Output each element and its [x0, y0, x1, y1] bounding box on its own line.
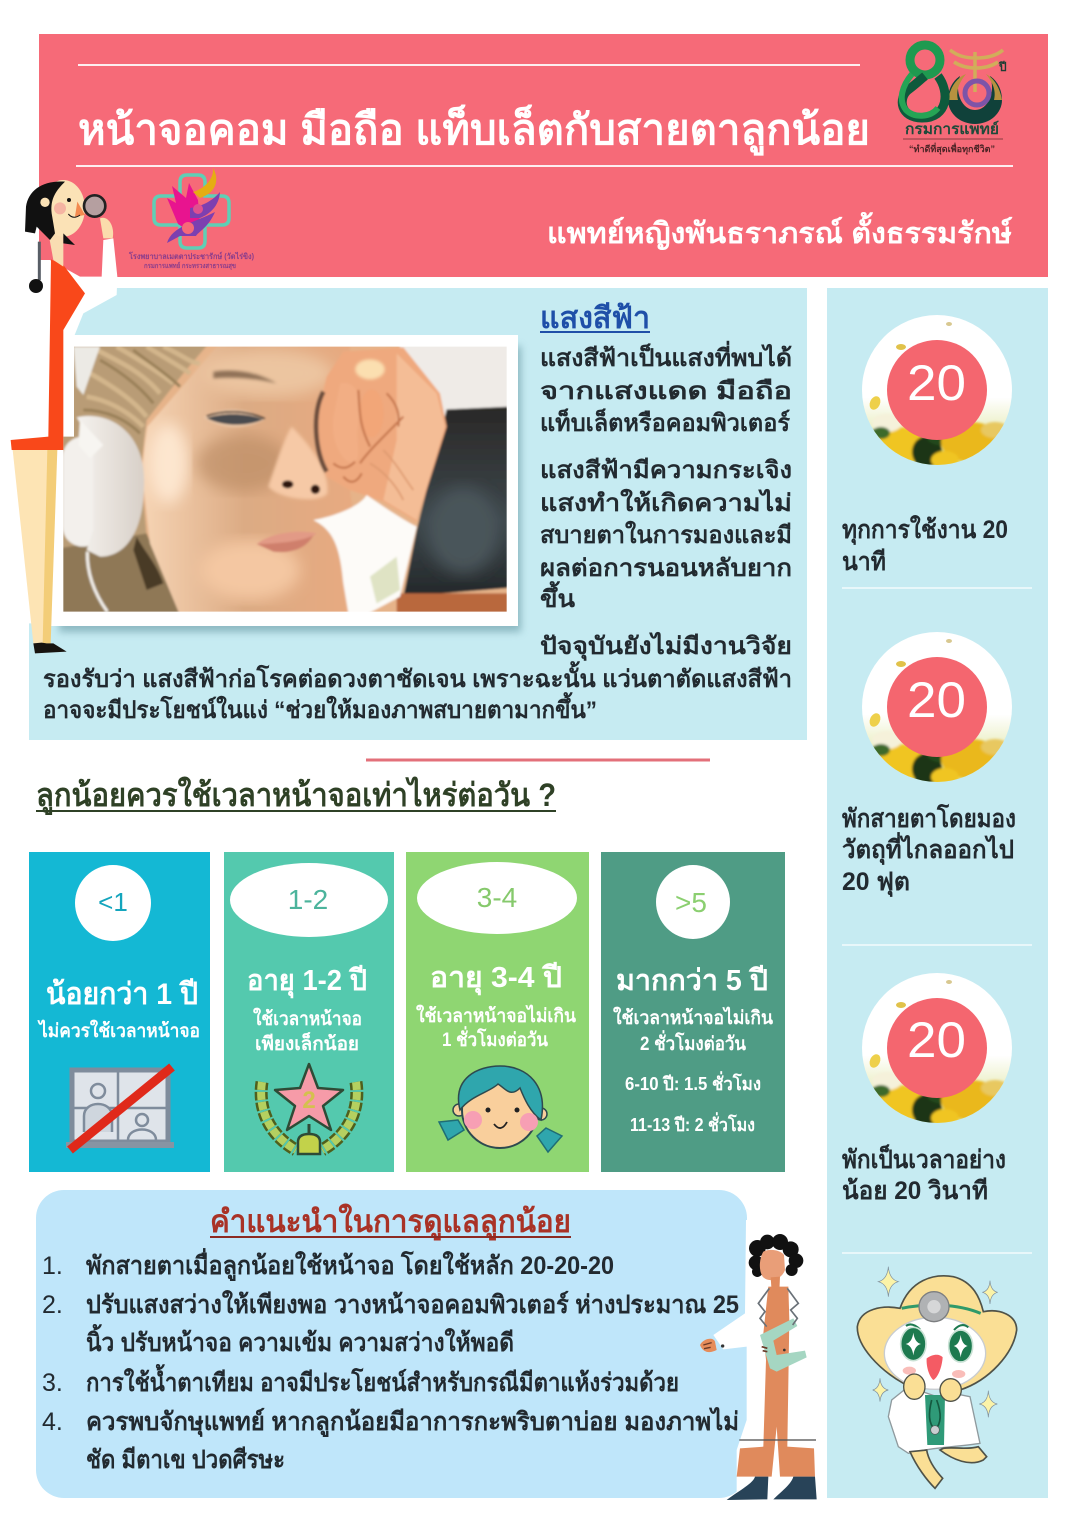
panel: over 5 years: มากกว่า 5 ปี: [616, 965, 768, 997]
logo: hospital: กรมการแพทย์ กระทรวงสาธารณสุข: [144, 261, 236, 270]
badge: 20 seconds: [862, 973, 1012, 1127]
panel: over 5 years: 6-10 ปี: 1.5 ชั่วโมง: [625, 1071, 761, 1094]
text block: blue light explanation: แสงทำให้เกิดความไม่: [540, 488, 792, 517]
badge: 20 feet: 20: [907, 672, 966, 728]
text block: numbered advice: นิ้ว ปรับหน้าจอ ความเข้ม ความสว่างให้พอดี: [86, 1323, 514, 1357]
panel: care advice: [36, 1190, 747, 1498]
text block: numbered advice: [42, 1248, 739, 1474]
panel: 20-20-20 column: [827, 288, 1048, 1498]
text block: blue light explanation: [43, 340, 792, 724]
text block: numbered advice: พักสายตาเมื่อลูกน้อยใช้หน้าจอ โดยใช้หลัก 20-20-20: [86, 1248, 614, 1282]
panel: age 1-2: เพียงเล็กน้อย: [255, 1031, 359, 1055]
panel: age 1-2: [224, 852, 394, 1172]
heading: care advice: คำแนะนำในการดูแลลูกน้อย: [210, 1203, 571, 1241]
panel: under 1 year: <1: [98, 887, 128, 917]
photo: child rubbing eye with headphones: [50, 330, 523, 632]
divider: pink rule: [366, 758, 710, 762]
icon: star trophy with laurel: 2: [302, 1087, 316, 1114]
panel: age 3-4: 3-4: [477, 882, 517, 913]
text block: numbered advice: ปรับแสงสว่างให้เพียงพอ วางหน้าจอคอมพิวเตอร์ ห่างประมาณ 25: [86, 1289, 739, 1319]
text block: numbered advice: ชัด มีตาเข ปวดศีรษะ: [86, 1446, 285, 1474]
text block: numbered advice: 1.: [42, 1252, 63, 1280]
text block: blue light explanation: อาจจะมีประโยชน์ในแง่ “ช่วยให้มองภาพสบายตามากขึ้น”: [43, 691, 597, 724]
text block: blue light explanation: ขึ้น: [540, 580, 576, 613]
text: every 20 minutes: ทุกการใช้งาน 20: [842, 514, 1008, 546]
badge: 20 minutes: 20: [907, 355, 966, 411]
logo: department of medical services 80 years: [902, 45, 1007, 155]
text block: blue light explanation: ปัจจุบันยังไม่มีงานวิจัย: [540, 631, 792, 662]
panel: header banner: [39, 34, 1048, 277]
illustration: mascot doctor: [857, 1267, 1017, 1488]
logo: department of medical services 80 years: กรมการแพทย์: [905, 120, 999, 138]
text: look 20 feet away: วัตถุที่ไกลออกไป: [842, 832, 1014, 866]
badge: 20 seconds: 20: [907, 1012, 966, 1068]
logo: department of medical services 80 years: ปี: [998, 60, 1007, 74]
badge: 20 feet: [862, 632, 1012, 786]
panel: under 1 year: [29, 852, 210, 1172]
logo: department of medical services 80 years: “ทำดีที่สุดเพื่อทุกชีวิต”: [909, 142, 995, 155]
text block: blue light explanation: จากแสงแดด มือถือ: [540, 378, 792, 405]
panel: age 3-4: อายุ 3-4 ปี: [430, 962, 562, 995]
panel: over 5 years: >5: [675, 887, 707, 918]
icon: girl face: [439, 1066, 562, 1152]
text block: blue light explanation: แสงสีฟ้าเป็นแสงที่พบได้: [540, 340, 792, 372]
panel: under 1 year: น้อยกว่า 1 ปี: [46, 978, 198, 1011]
panel: age 1-2: อายุ 1-2 ปี: [247, 965, 367, 998]
text block: blue light explanation: ผลต่อการนอนหลับยาก: [540, 555, 792, 582]
text block: numbered advice: 2.: [42, 1291, 63, 1319]
text: rest at least 20 seconds: [842, 1144, 1006, 1205]
heading: blue light: แสงสีฟ้า: [540, 302, 650, 335]
panel: age 3-4: 1 ชั่วโมงต่อวัน: [442, 1026, 548, 1051]
text block: numbered advice: ควรพบจักษุแพทย์ หากลูกน้อยมีอาการกะพริบตาบ่อย มองภาพไม่: [86, 1406, 739, 1438]
badge: 20 minutes: [862, 315, 1012, 469]
text block: numbered advice: การใช้น้ำตาเทียม อาจมีประโยชน์สำหรับกรณีมีตาแห้งร่วมด้วย: [86, 1363, 679, 1397]
panel: over 5 years: 2 ชั่วโมงต่อวัน: [640, 1030, 746, 1055]
text: look 20 feet away: พักสายตาโดยมอง: [842, 803, 1016, 833]
illustration: doctor with magnifier: [11, 180, 117, 653]
text: every 20 minutes: [842, 514, 1008, 576]
icon: star trophy with laurel: [261, 1064, 357, 1154]
illustration: doctor pointing: [700, 1220, 827, 1500]
panel: blue light: [29, 288, 807, 740]
panel: age 3-4: [406, 852, 589, 1172]
text: look 20 feet away: 20 ฟุต: [842, 868, 910, 898]
text: rest at least 20 seconds: น้อย 20 วินาที: [842, 1177, 988, 1205]
logo: hospital: [128, 168, 254, 270]
text: rest at least 20 seconds: พักเป็นเวลาอย่าง: [842, 1144, 1006, 1174]
text: every 20 minutes: นาที: [842, 548, 886, 576]
text block: numbered advice: 3.: [42, 1369, 63, 1397]
panel: over 5 years: [601, 852, 785, 1172]
panel: age 3-4: ใช้เวลาหน้าจอไม่เกิน: [416, 1004, 576, 1027]
author name: แพทย์หญิงพันธราภรณ์ ตั้งธรรมรักษ์: [547, 211, 1013, 251]
text block: blue light explanation: แสงสีฟ้ามีความกระเจิง: [540, 457, 792, 484]
panel: age 1-2: 1-2: [288, 884, 328, 915]
title: หน้าจอคอม มือถือ แท็บเล็ตกับสายตาลูกน้อย: [78, 104, 870, 156]
text block: numbered advice: 4.: [42, 1408, 63, 1436]
text block: blue light explanation: แท็บเล็ตหรือคอมพิวเตอร์: [540, 408, 790, 437]
logo: hospital: โรงพยาบาลเมตตาประชารักษ์ (วัดไร่ขิง): [128, 251, 254, 261]
text block: blue light explanation: สบายตาในการมองและมี: [540, 520, 792, 549]
text block: blue light explanation: รองรับว่า แสงสีฟ้าก่อโรคต่อดวงตาชัดเจน เพราะฉะนั้น แว่นตาตัดแสงสีฟ้า: [43, 660, 792, 693]
heading: screen time question: ลูกน้อยควรใช้เวลาหน้าจอเท่าไหร่ต่อวัน ?: [36, 776, 556, 816]
icon: crossed-out video call: [66, 1067, 174, 1150]
panel: over 5 years: ใช้เวลาหน้าจอไม่เกิน: [613, 1006, 773, 1029]
panel: over 5 years: 11-13 ปี: 2 ชั่วโมง: [630, 1112, 755, 1135]
panel: under 1 year: ไม่ควรใช้เวลาหน้าจอ: [37, 1019, 200, 1042]
panel: age 1-2: ใช้เวลาหน้าจอ: [253, 1007, 362, 1030]
text: look 20 feet away: [842, 803, 1016, 898]
